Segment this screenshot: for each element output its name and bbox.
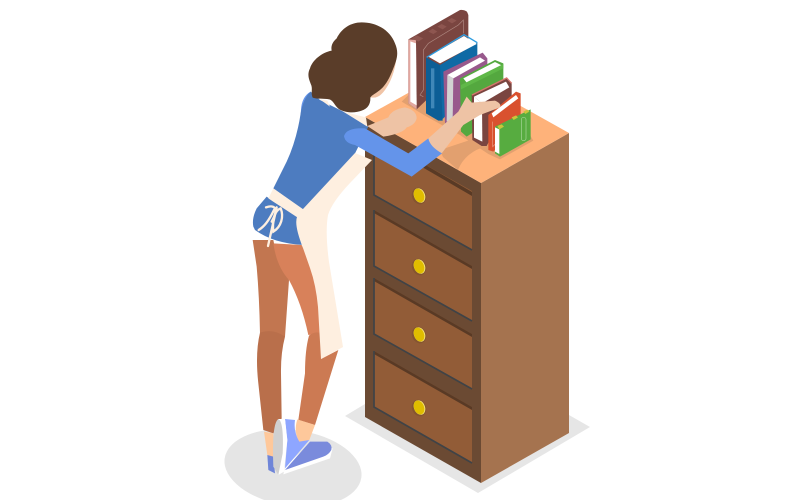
shadow on cabinet top — [440, 140, 487, 170]
drawer 1 — [374, 135, 472, 250]
cabinet top — [365, 68, 569, 183]
shoe — [267, 419, 333, 475]
woman — [253, 22, 500, 475]
floor shadow: ellipse under woman — [219, 421, 367, 500]
legs and shoe — [253, 240, 338, 475]
book: blue — [426, 35, 477, 121]
back leg — [253, 240, 289, 433]
cabinet front panel — [365, 117, 481, 483]
book: green — [460, 60, 503, 137]
book: small maroon — [472, 78, 512, 146]
ankles — [264, 419, 315, 457]
hair — [308, 22, 397, 112]
drawer 2 — [374, 210, 472, 321]
sleeve of near arm — [344, 128, 442, 177]
shadow under books — [402, 93, 533, 159]
cabinet — [365, 68, 569, 483]
floor shadow: cabinet — [345, 404, 590, 493]
book: red — [488, 92, 521, 152]
books on cabinet — [402, 10, 533, 159]
front leg — [273, 243, 338, 425]
reaching hand and forearm — [428, 97, 500, 153]
drawer 4 — [374, 351, 472, 463]
apron bib edge — [343, 112, 367, 127]
drawer 3 — [374, 278, 472, 389]
face skin — [371, 50, 397, 98]
apron skirt — [296, 153, 372, 359]
apron strap — [268, 188, 303, 217]
near hand on cabinet — [367, 107, 417, 137]
upper body — [253, 92, 368, 246]
cabinet side panel — [481, 133, 569, 483]
book: small green — [495, 109, 531, 157]
book: purple — [443, 53, 487, 123]
far sleeve sliver — [300, 92, 313, 122]
shirt — [273, 92, 368, 210]
neck collar — [320, 99, 330, 107]
apron string bow — [259, 206, 282, 246]
book: maroon — [408, 10, 468, 109]
shorts — [253, 197, 303, 245]
hair shape — [308, 22, 397, 112]
